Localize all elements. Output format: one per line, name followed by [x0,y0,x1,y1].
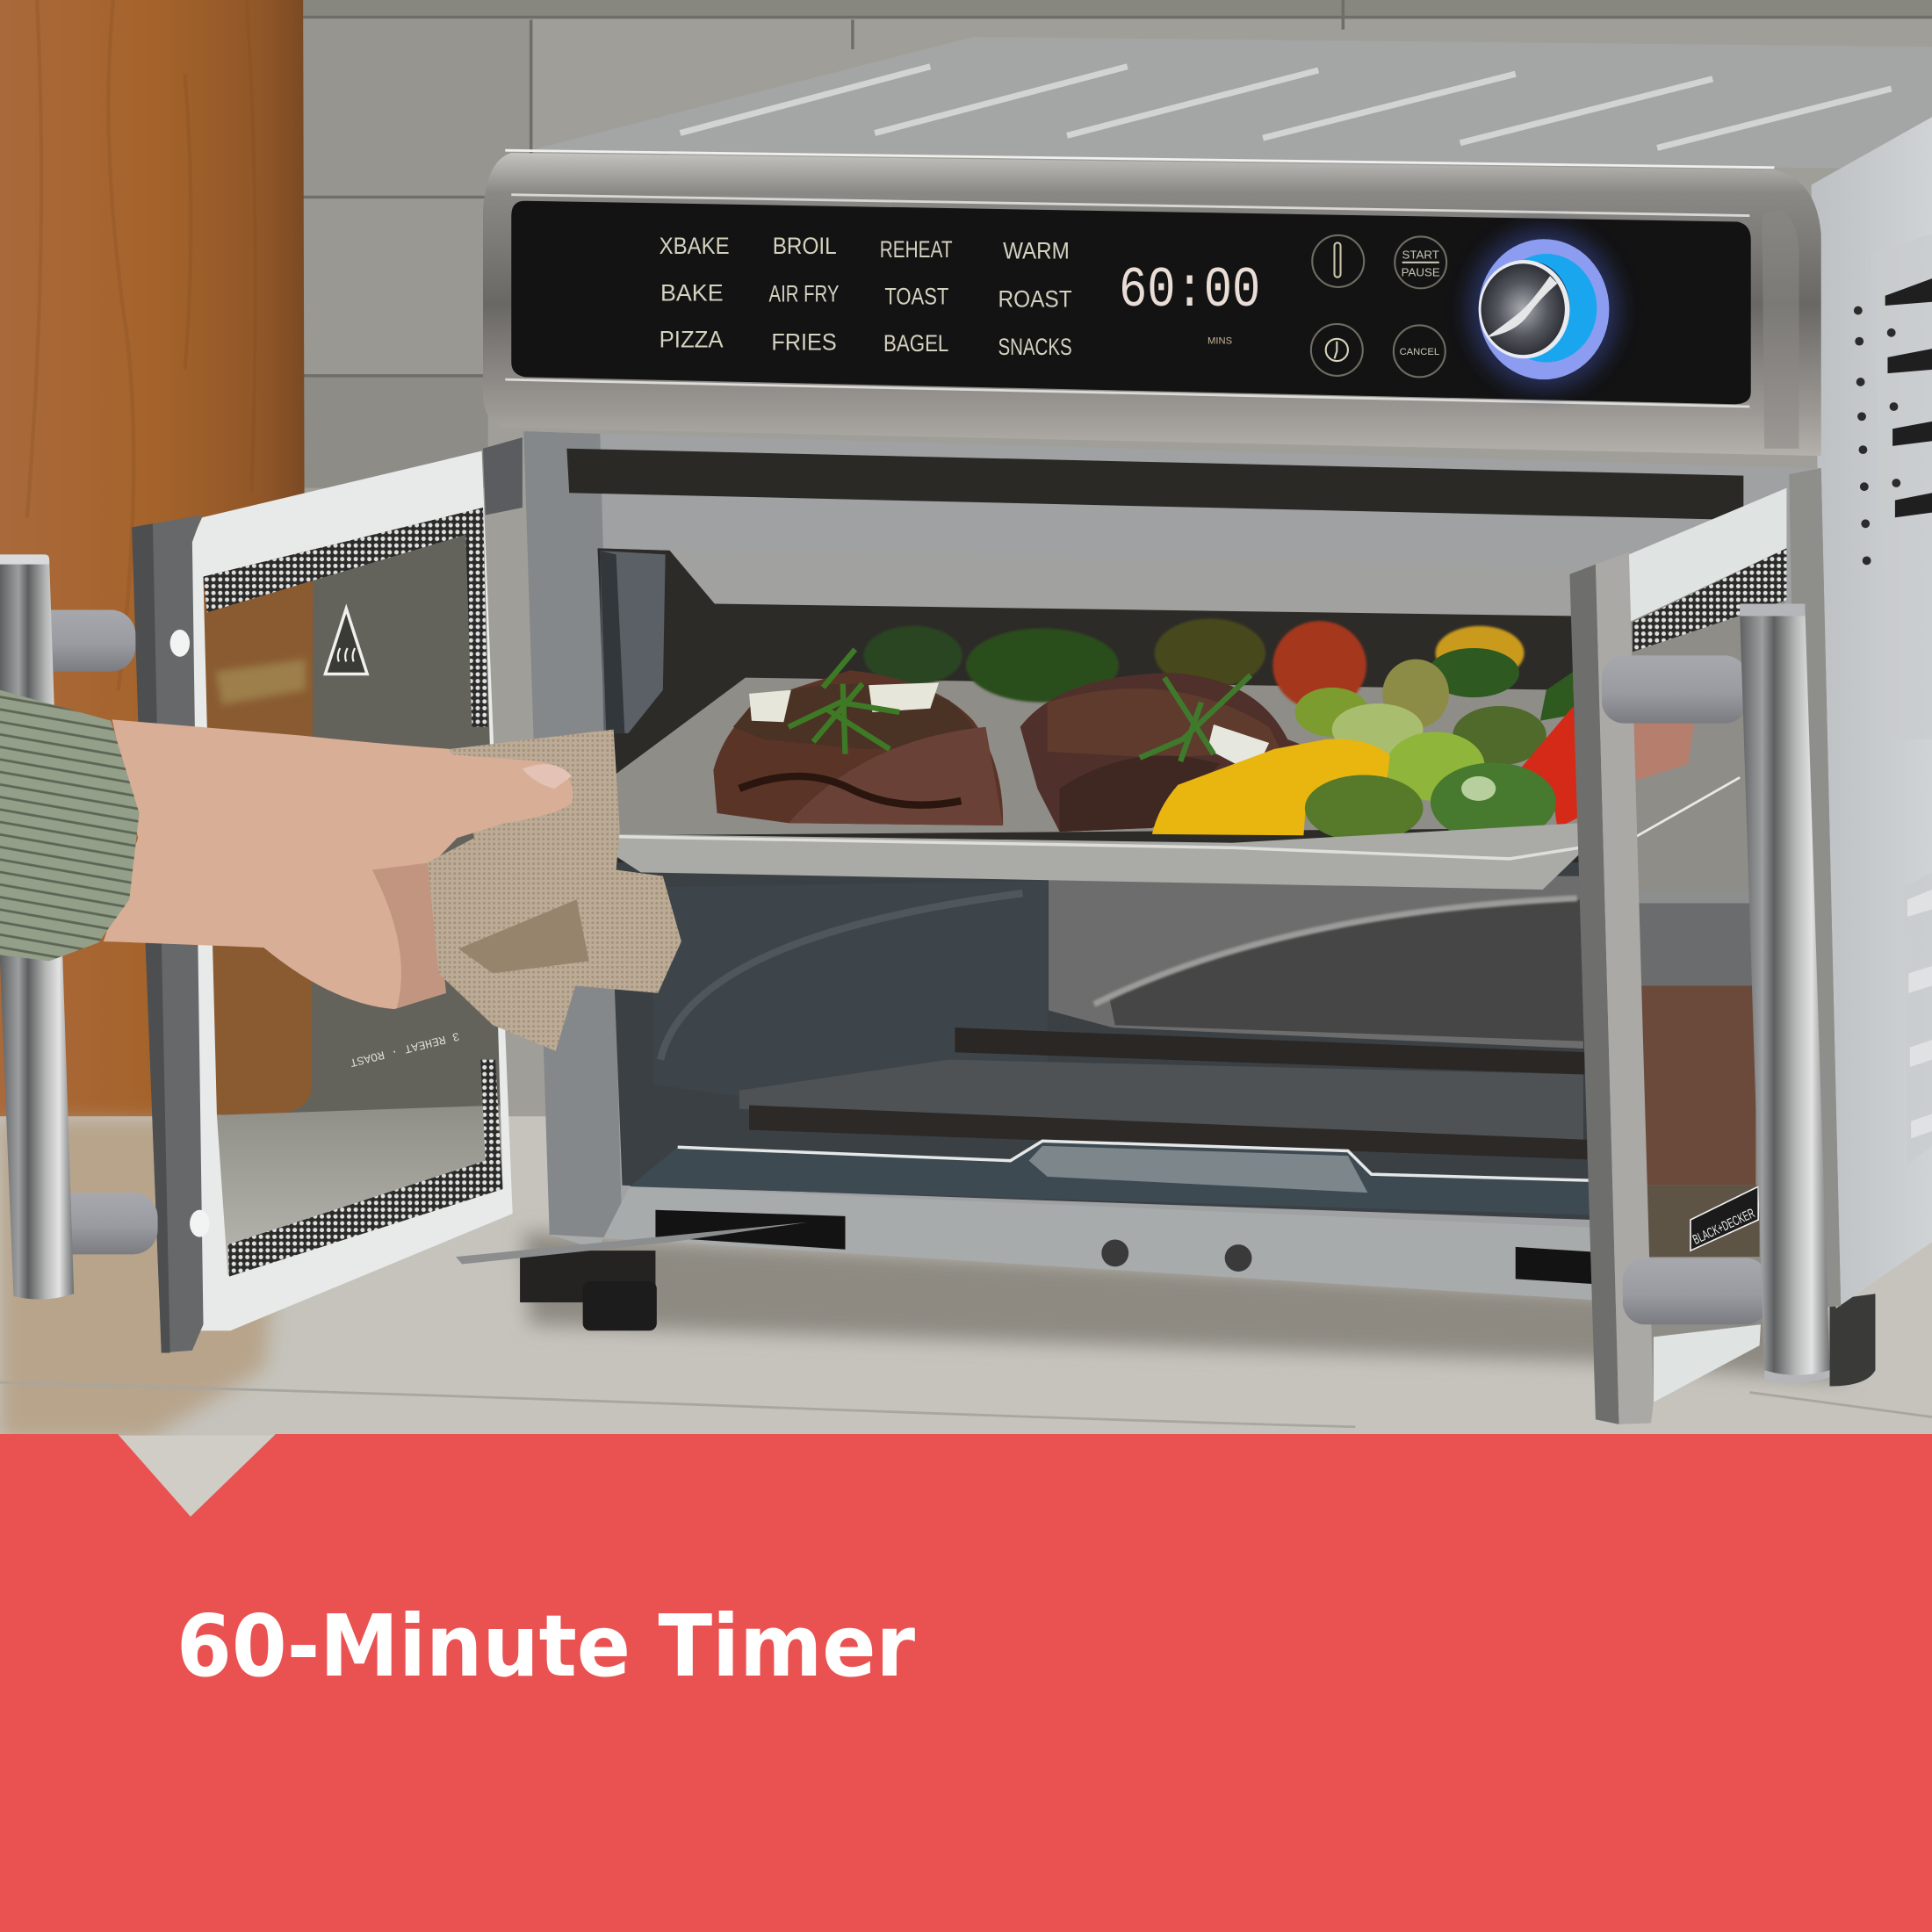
oven base lip [456,1186,1593,1300]
perforated border [1633,548,1786,652]
oven front frame [523,431,1841,1308]
mode labels: XBAKE [660,233,730,259]
steak left [713,649,1003,825]
steak right [1020,673,1326,832]
mode labels: BROIL [773,233,837,259]
brussels sprouts [1295,648,1574,801]
button labels [1400,249,1440,357]
curled fingers [372,862,446,1008]
mode labels: WARM [1003,238,1070,264]
steel edge [1569,565,1619,1424]
mode labels: PIZZA [660,327,724,353]
mode labels: FRIES [771,328,837,355]
steel edge [132,515,204,1353]
left door [132,437,523,1353]
touch buttons [1311,235,1446,377]
tray surface [616,678,1580,835]
door frame [191,451,513,1330]
mins label: MINS [1208,335,1232,346]
door glass [204,508,502,1275]
oven feet [520,1251,1875,1386]
mode labels: SNACKS [998,334,1072,360]
cutting board [0,0,312,1116]
button labels: START [1402,249,1439,262]
cavity [597,548,1592,1220]
perforated border [204,508,502,1277]
photo: air fryer oven scene [0,0,1932,1535]
food [713,618,1580,841]
mode labels [660,233,1072,360]
left door handle [0,554,158,1300]
oven right side with vents [1811,117,1932,1308]
crumb tray [630,1141,1590,1215]
button labels: CANCEL [1400,347,1439,357]
thumbnail [523,764,572,789]
right door handle [1602,603,1830,1383]
control panel steel fascia [483,150,1821,456]
dial with blue light ring [1467,228,1620,391]
thumb [425,754,573,838]
red pepper [1519,706,1580,828]
button labels: PAUSE [1402,265,1440,278]
mode labels: AIR FRY [769,281,840,307]
sweater sleeve [0,690,140,961]
door frame [1629,488,1786,1402]
hand [104,719,493,1009]
oven top [530,37,1932,169]
right door [1569,488,1786,1424]
countertop [0,1116,1932,1535]
tray front lip [616,823,1580,890]
hand with oven cloth [0,690,681,1051]
red banner with notch [0,1434,1932,1932]
mode labels: BAKE [660,279,724,306]
timer readout: 60:00 [1119,259,1260,323]
control panel black display [511,201,1751,404]
front sprouts [1305,762,1556,841]
brand badge: BLACK+DECKER [1690,1206,1757,1248]
mode labels: REHEAT [880,236,953,263]
mode labels: TOAST [884,284,948,310]
mode labels: BAGEL [883,330,948,357]
yellow pepper [1152,739,1390,835]
cloth [428,730,681,1051]
dark vent strip [566,449,1743,520]
cloth fold [458,899,589,973]
door glass [1629,548,1786,1402]
back vegetables [864,618,1525,710]
mode labels: ROAST [998,285,1072,312]
reversed door print: 3 REHEAT · ROAST [349,1029,461,1069]
title: 60-Minute Timer [177,1597,915,1696]
hot surface warning icon [325,609,367,674]
brand badge [1690,1186,1758,1251]
wall [296,0,1932,1134]
